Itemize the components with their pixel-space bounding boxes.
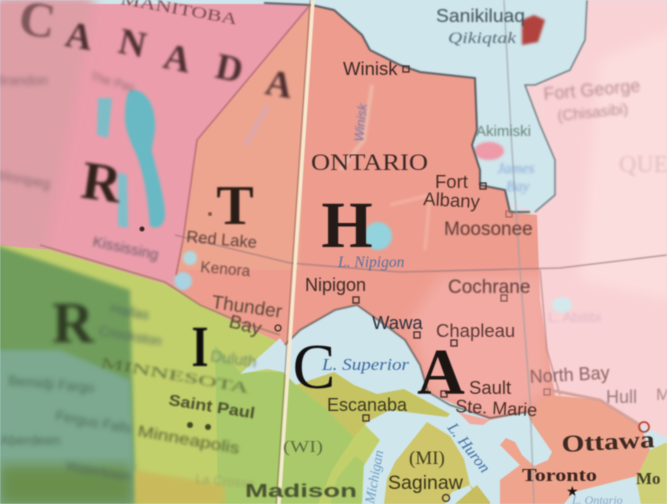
label: Red Lake: Red Lake	[186, 228, 258, 252]
label: Que: QUE	[619, 152, 667, 178]
label: Saginaw: Saginaw	[388, 472, 464, 494]
label: Winisk river: Winisk	[351, 101, 370, 142]
label: Saint Paul: Saint Paul	[167, 392, 256, 423]
label: Escanaba: Escanaba	[327, 395, 408, 415]
marker: Moosonee	[506, 211, 512, 217]
blurred small towns	[0, 300, 163, 484]
label: Cochrane: Cochrane	[448, 277, 530, 298]
river: Winisk	[340, 85, 372, 170]
white meridian ring	[279, 0, 313, 504]
marker: Cochrane	[501, 295, 507, 301]
marker: Wawa	[414, 332, 420, 338]
label: Duluth: Duluth	[209, 348, 258, 371]
region: bottom yellow tint	[135, 470, 225, 504]
label: Sault Ste. Marie: Ste. Marie	[455, 396, 538, 420]
label: L. Superior: L. Superior	[321, 355, 409, 374]
tint: western Ontario	[178, 8, 308, 270]
ring shadow	[276, 0, 310, 504]
label: James Bay: James	[497, 161, 535, 177]
city markers	[275, 66, 649, 502]
letter: CANADA	[16, 0, 296, 107]
label: Thunder Bay	[210, 292, 284, 340]
label: L. Michigan: Michigan	[363, 449, 387, 504]
label: Nipigon: Nipigon	[305, 275, 366, 295]
island: Akimiski	[474, 142, 504, 160]
region: southern Ontario	[500, 395, 650, 504]
marker: Escanaba	[363, 415, 369, 421]
meridian east	[504, 0, 534, 504]
label: Kississing: Kississing	[91, 233, 160, 264]
meridian band	[276, 0, 313, 504]
letter: T: T	[216, 175, 254, 237]
coast: Quebec	[525, 0, 587, 212]
letter: R west: R	[52, 290, 95, 355]
label: Winisk town: Winisk	[343, 58, 398, 79]
label: Fort Albany: Albany	[423, 188, 481, 212]
lake: Nipigon	[364, 222, 392, 250]
label: Fort Albany	[423, 171, 481, 212]
letter: H: H	[321, 189, 373, 262]
region: blurred green west	[0, 245, 135, 504]
label: Toronto: Toronto	[522, 465, 597, 485]
blurred Canadian towns: The Pas	[89, 69, 136, 94]
marker: Chapleau	[451, 340, 457, 346]
letter: CANADA: A	[160, 36, 195, 82]
label: Wawa: Wawa	[372, 312, 423, 333]
region: Ontario salmon	[172, 5, 555, 420]
label: North Bay: North Bay	[529, 363, 610, 387]
label: Minneapolis: Minneapolis	[136, 423, 241, 458]
island: Belcher	[522, 15, 545, 45]
label: L. Abitibi: L. Abitibi	[548, 309, 601, 325]
marker: Winisk	[403, 66, 409, 72]
label: L. Nipigon: L. Nipigon	[337, 254, 405, 271]
lake: Winnipegosis	[118, 172, 128, 228]
blurred small towns: Watertown	[64, 457, 133, 484]
marker: Saginaw	[442, 494, 450, 502]
label: WI: (WI)	[283, 437, 323, 456]
border: Ontario Quebec	[540, 270, 560, 395]
region: Ontario tints	[178, 8, 550, 420]
marker: North Bay	[544, 389, 550, 395]
blurred small towns: Hallas	[109, 300, 151, 323]
region: Quebec pale pink	[500, 0, 667, 440]
lake: Lake of the Woods	[174, 272, 192, 290]
label: Akimiski: Akimiski	[476, 123, 531, 140]
region: US yellow green	[0, 245, 380, 504]
label: La Crosse: La Crosse	[195, 471, 255, 491]
border: Ontario Manitoba	[176, 5, 310, 275]
coast: Hudson Bay south	[264, 3, 530, 212]
marker: Kississing	[140, 226, 144, 232]
lake: Manitoba	[97, 98, 112, 138]
label: Sault Ste. Marie: Sault	[469, 377, 511, 398]
marker: Red Lake	[208, 212, 212, 216]
letter: I: I	[192, 314, 208, 379]
letter: C: C	[293, 331, 335, 402]
blurred small towns: Fergus Falls	[54, 407, 133, 436]
border: US Canada	[40, 245, 280, 335]
region: Michigan thumb bay	[445, 485, 477, 504]
label: Sanikiluaq: Sanikiluaq	[436, 6, 525, 26]
label: MI: (MI)	[409, 448, 445, 469]
marker: Sault	[441, 391, 447, 397]
region: Montreal green	[636, 440, 667, 504]
region: Upper Peninsula olive	[296, 372, 450, 437]
letter: CANADA: A	[62, 14, 96, 59]
lake: Seul	[183, 251, 197, 265]
region: Michigan thumb	[455, 485, 490, 504]
lakes and islands	[97, 15, 572, 313]
region: Manitoulin pink	[458, 412, 490, 425]
marker: Thunder Bay	[275, 325, 281, 331]
region: bottom olive blur	[0, 465, 135, 504]
label: Qikiqtak: Qikiqtak	[448, 30, 517, 47]
blurred small towns: Aberdeen	[0, 432, 61, 448]
region: Lake Ontario	[564, 479, 642, 504]
region: Lower Michigan	[384, 422, 490, 504]
letter: A: A	[417, 336, 465, 409]
label: Minnesota: MINNESOTA	[99, 355, 250, 397]
label: Ontario: ONTARIO	[311, 150, 428, 175]
marker: Fort Albany	[480, 183, 486, 189]
label: L. Huron: L. Huron	[443, 419, 493, 476]
label: Mo edge: Mo	[636, 469, 661, 488]
region: Manitoba pink	[0, 4, 312, 290]
label: Chapleau: Chapleau	[436, 320, 515, 341]
river: Albany	[390, 195, 430, 250]
blurred Canadian towns	[0, 69, 136, 192]
river: west Ontario	[245, 105, 268, 145]
parallel	[175, 235, 667, 272]
letter: CANADA: D	[212, 46, 247, 92]
label: James Bay	[497, 161, 535, 195]
region: Lake Superior	[240, 305, 428, 395]
letter: R north: R	[78, 150, 126, 215]
letter: CANADA: N	[115, 21, 150, 67]
region: Door peninsula green	[330, 456, 364, 504]
coast: Superior	[285, 305, 527, 418]
label: Kenora: Kenora	[200, 259, 251, 280]
letter: CANADA: A	[262, 62, 296, 107]
label: Fort Albany: Fort	[435, 171, 468, 192]
Ottawa river	[550, 390, 640, 425]
large serif lettering	[16, 0, 465, 409]
label: James Bay: Bay	[506, 179, 530, 195]
marker: Saint Paul dots	[187, 422, 211, 430]
label: Fort George: Fort George	[543, 76, 641, 104]
tint: south-east Ontario	[410, 275, 550, 420]
lake: Winnipeg	[125, 90, 165, 228]
marker: Nipigon	[353, 297, 359, 303]
label: Fort George: (Chisasibi)	[557, 101, 629, 125]
label: Madison: Madison	[245, 481, 357, 501]
region: teal blur block	[0, 350, 135, 504]
lake: Abitibi	[552, 297, 572, 313]
blurred small towns: Crookston	[97, 322, 163, 349]
blurred small towns: Bemidji Fargo	[8, 372, 95, 396]
region: far west pale pink	[0, 0, 95, 250]
label: Sault Ste. Marie	[455, 377, 538, 420]
label: Ottawa: Ottawa	[561, 427, 655, 458]
region: Wisconsin green	[215, 345, 354, 504]
marker: Ottawa	[639, 422, 649, 432]
label: Hull: Hull	[606, 387, 637, 407]
label: Moosonee: Moosonee	[444, 219, 533, 240]
label: Thunder Bay: Bay	[227, 311, 264, 340]
marker: Toronto star: ★	[566, 483, 579, 499]
label: Thunder Bay: Thunder	[210, 292, 284, 323]
region: Quebec upper highlight	[580, 30, 667, 300]
label: Fort George	[543, 76, 641, 125]
